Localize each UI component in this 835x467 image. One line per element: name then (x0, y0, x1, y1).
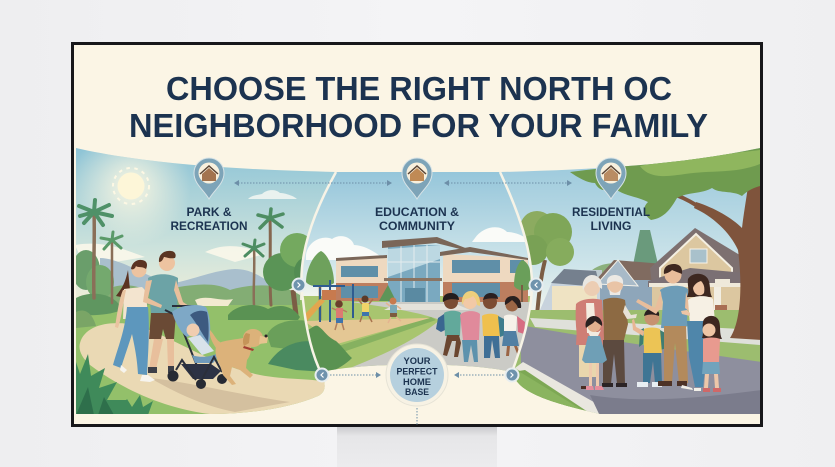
girl in blue dress (576, 316, 607, 390)
foreground plants (76, 354, 153, 415)
building (336, 237, 528, 303)
screen frame (72, 44, 762, 426)
stroller (165, 305, 227, 389)
walking path (79, 323, 325, 414)
man (143, 251, 192, 373)
bushes (228, 305, 300, 320)
panel: residential living scene (498, 146, 762, 416)
label: residential living (572, 205, 650, 233)
icon: residential pin (596, 158, 626, 199)
monitor stand (337, 426, 497, 467)
big tree (570, 148, 762, 340)
trees (319, 285, 321, 320)
little girl (702, 316, 722, 392)
label: park and recreation (170, 205, 248, 233)
houses (540, 228, 740, 310)
panel: park and recreation scene (76, 148, 334, 414)
label: education and community (375, 205, 459, 233)
woman (113, 260, 155, 382)
playground kids (332, 296, 401, 330)
label: residential living: LIVING (590, 219, 632, 233)
title: NEIGHBORHOOD FOR YOUR FAMILY (129, 107, 708, 144)
callout: your perfect home base: HOME (403, 377, 431, 387)
palm trees (79, 200, 283, 305)
callout: your perfect home base: YOUR (404, 356, 431, 366)
label: park and recreation: RECREATION (170, 219, 248, 233)
mother (681, 274, 715, 391)
playground (304, 280, 430, 344)
arrow: connectors (238, 183, 569, 425)
callout: your perfect home base: BASE (405, 387, 429, 397)
small tree (522, 211, 574, 310)
label: park and recreation: PARK & (186, 205, 232, 219)
label: residential living: RESIDENTIAL (572, 205, 650, 219)
dog (210, 329, 268, 385)
label: education and community: EDUCATION & (375, 205, 459, 219)
grandmother (576, 275, 605, 389)
big tree (293, 290, 296, 315)
boy with backpack (632, 309, 667, 387)
panel: education and community scene (296, 170, 540, 376)
callout: your perfect home base (386, 344, 448, 406)
callout: your perfect home base: PERFECT (396, 366, 438, 376)
infographic display (71, 42, 763, 446)
icon: park pin (194, 158, 224, 199)
panel dividers (301, 172, 532, 375)
bushes (308, 326, 352, 371)
trees left (76, 250, 100, 290)
label: education and community: COMMUNITY (379, 219, 455, 233)
icon: education pin (402, 158, 432, 199)
icon: navigation buttons (292, 278, 542, 382)
arrowheads (234, 180, 572, 378)
lawn and road (500, 310, 762, 416)
father (636, 264, 689, 386)
title (129, 70, 708, 144)
school kids group (436, 291, 525, 362)
icon: sun (77, 151, 185, 236)
road and plaza (350, 302, 530, 370)
title: CHOOSE THE RIGHT NORTH OC (166, 70, 672, 107)
grandfather (602, 275, 637, 387)
